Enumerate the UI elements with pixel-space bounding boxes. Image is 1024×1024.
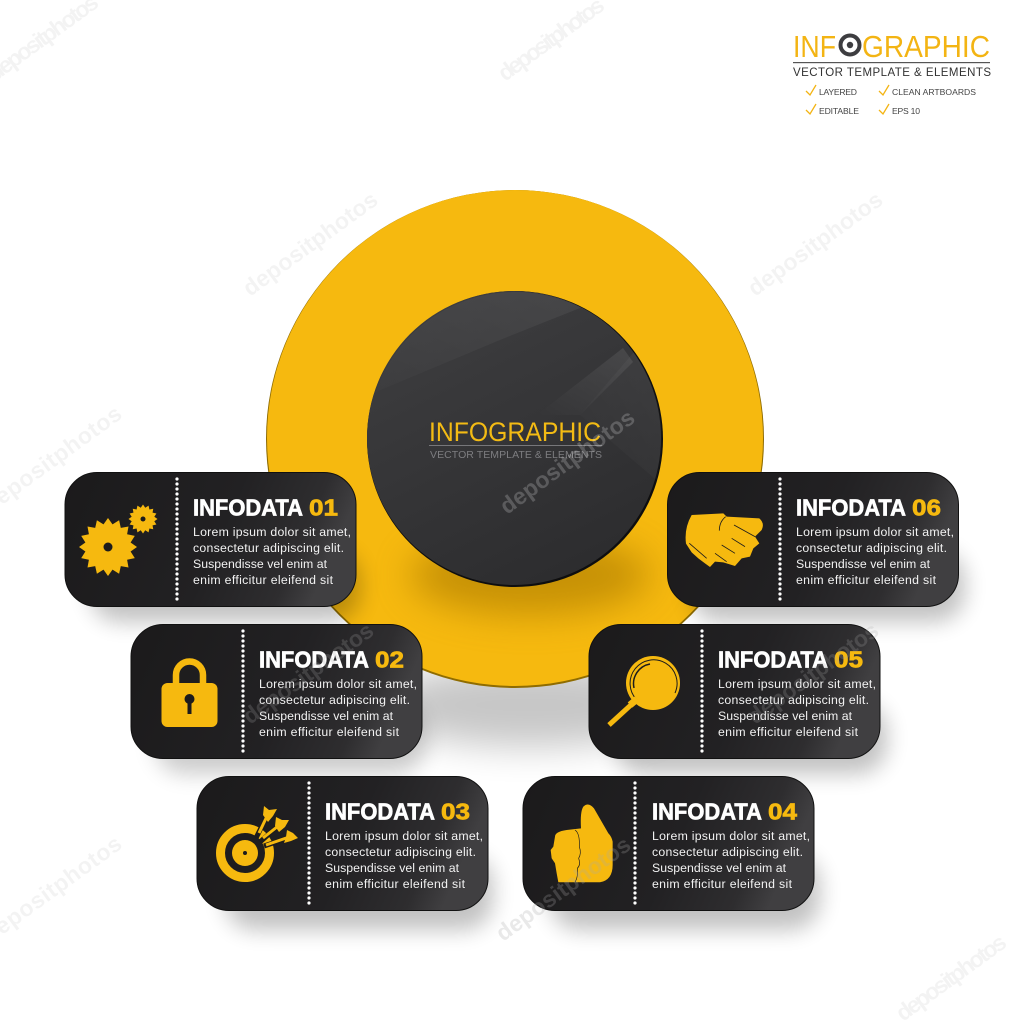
heading 01: INFODATA xyxy=(193,494,303,520)
body 03 xyxy=(325,829,483,891)
body 01: Suspendisse vel enim at xyxy=(193,557,328,571)
yellow circle xyxy=(266,190,764,688)
logo wordmark: INF xyxy=(793,29,836,64)
watermarks over cards: depositphotos xyxy=(743,617,883,729)
dark circle shadow on yellow xyxy=(410,535,650,615)
center watermark: depositphotos xyxy=(495,404,639,519)
body 04: Suspendisse vel enim at xyxy=(652,861,787,875)
checklist xyxy=(806,85,976,116)
heading 04: 04 xyxy=(768,798,797,824)
body 03: Lorem ipsum dolor sit amet, xyxy=(325,829,483,843)
body 02 xyxy=(259,677,417,739)
card 03 xyxy=(197,776,488,910)
card 04 xyxy=(523,776,814,910)
body 01 xyxy=(193,525,351,587)
icon: padlock xyxy=(162,662,218,727)
body 01: enim efficitur eleifend sit xyxy=(193,573,334,587)
body 04: consectetur adipiscing elit. xyxy=(652,845,803,859)
checklist: LAYERED xyxy=(819,87,857,97)
body 04: enim efficitur eleifend sit xyxy=(652,877,793,891)
body 01: Lorem ipsum dolor sit amet, xyxy=(193,525,351,539)
body 02: consectetur adipiscing elit. xyxy=(259,693,410,707)
body 06: consectetur adipiscing elit. xyxy=(796,541,947,555)
body 03: consectetur adipiscing elit. xyxy=(325,845,476,859)
body 06: Lorem ipsum dolor sit amet, xyxy=(796,525,954,539)
body 04 xyxy=(652,829,810,891)
icon: gears xyxy=(79,504,158,576)
icon: thumbs up xyxy=(551,805,613,882)
card shadows xyxy=(90,550,965,930)
body 05: Suspendisse vel enim at xyxy=(718,709,853,723)
body 02: enim efficitur eleifend sit xyxy=(259,725,400,739)
checklist: EPS 10 xyxy=(892,106,920,116)
body 06: Suspendisse vel enim at xyxy=(796,557,931,571)
body 04: Lorem ipsum dolor sit amet, xyxy=(652,829,810,843)
body 01: consectetur adipiscing elit. xyxy=(193,541,344,555)
card 02 xyxy=(131,624,422,758)
body 02: Suspendisse vel enim at xyxy=(259,709,394,723)
heading 01: 01 xyxy=(309,494,338,520)
heading 03: 03 xyxy=(441,798,470,824)
body 05: consectetur adipiscing elit. xyxy=(718,693,869,707)
body 05 xyxy=(718,677,876,739)
card 01 xyxy=(65,472,356,606)
top right logo xyxy=(793,29,991,116)
icon: handshake xyxy=(686,513,763,567)
heading 06: INFODATA xyxy=(796,494,906,520)
watermarks over cards xyxy=(238,617,883,946)
logo wordmark: GRAPHIC xyxy=(862,29,990,64)
heading 02: 02 xyxy=(375,646,404,672)
heading 05: INFODATA xyxy=(718,646,828,672)
heading 03: INFODATA xyxy=(325,798,435,824)
body 05: Lorem ipsum dolor sit amet, xyxy=(718,677,876,691)
body 05: enim efficitur eleifend sit xyxy=(718,725,859,739)
body 03: enim efficitur eleifend sit xyxy=(325,877,466,891)
watermark layer: depositphotos xyxy=(743,186,887,301)
watermark layer: depositphotos xyxy=(238,186,382,301)
center title: VECTOR TEMPLATE & ELEMENTS xyxy=(430,449,602,461)
body 06 xyxy=(796,525,954,587)
card 05 xyxy=(589,624,880,758)
center title: INFOGRAPHIC xyxy=(429,417,601,447)
dark central circle xyxy=(366,280,680,587)
watermark layer: depositphotos xyxy=(891,929,1011,1024)
body 06: enim efficitur eleifend sit xyxy=(796,573,937,587)
heading 05: 05 xyxy=(834,646,863,672)
watermarks over cards: depositphotos xyxy=(238,617,378,729)
card 06 xyxy=(668,472,958,606)
icon: target with arrows xyxy=(220,806,298,878)
heading 06: 06 xyxy=(912,494,941,520)
heading 04: INFODATA xyxy=(652,798,762,824)
logo wordmark xyxy=(793,29,990,64)
center title xyxy=(429,417,602,461)
watermarks over cards: depositphotos xyxy=(491,831,635,946)
body 03: Suspendisse vel enim at xyxy=(325,861,460,875)
big soft shadow below yellow circle xyxy=(380,663,680,747)
checklist: EDITABLE xyxy=(819,106,859,116)
heading 02: INFODATA xyxy=(259,646,369,672)
checklist: CLEAN ARTBOARDS xyxy=(892,87,976,97)
body 02: Lorem ipsum dolor sit amet, xyxy=(259,677,417,691)
top right logo: VECTOR TEMPLATE & ELEMENTS xyxy=(793,67,991,79)
icon: magnifier xyxy=(609,656,680,725)
